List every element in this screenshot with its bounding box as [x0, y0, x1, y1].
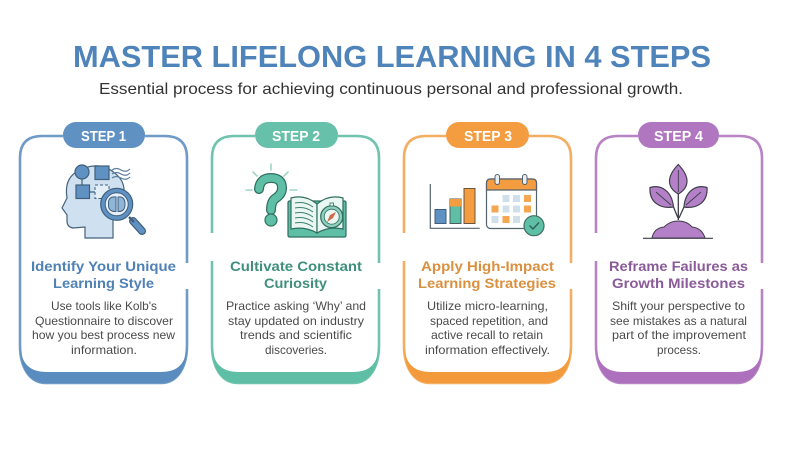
body text: stay updated on industry	[228, 314, 364, 328]
heading	[418, 258, 556, 291]
body text	[32, 299, 175, 357]
heading: Identify Your Unique	[31, 258, 176, 274]
step 2 badge: STEP 2	[272, 128, 320, 145]
step 1 badge: STEP 1	[81, 128, 126, 145]
icon: growing plant	[643, 164, 713, 238]
body text: part of the improvement	[612, 328, 747, 342]
title: MASTER LIFELONG LEARNING IN 4 STEPS	[73, 39, 711, 74]
heading: Cultivate Constant	[230, 258, 362, 274]
body text: Use tools like Kolb's	[51, 299, 157, 313]
body text: Practice asking ‘Why’ and	[226, 299, 366, 313]
heading	[31, 258, 176, 291]
step 4 badge: STEP 4	[654, 128, 704, 145]
body text: spaced repetition, and	[430, 314, 548, 328]
body text: how you best process new	[32, 328, 175, 342]
body text: active recall to retain	[431, 328, 543, 342]
panel: step 1	[20, 122, 187, 383]
panel: step 4	[596, 122, 762, 383]
heading	[230, 258, 362, 291]
icon: bar chart and calendar	[430, 174, 544, 236]
body text: information effectively.	[425, 343, 550, 357]
step 1 badge	[63, 122, 145, 148]
heading: Apply High-Impact	[421, 258, 554, 274]
heading	[609, 258, 748, 291]
step 3 badge	[446, 122, 529, 148]
body text	[425, 299, 550, 357]
body text	[226, 299, 366, 357]
step 3 badge: STEP 3	[464, 128, 512, 145]
heading: Learning Style	[53, 275, 154, 291]
step 4 badge	[638, 122, 719, 148]
icon: question mark and open book	[246, 164, 346, 237]
heading: Learning Strategies	[418, 275, 556, 291]
heading: Growth Milestones	[612, 275, 745, 291]
step 2 badge	[255, 122, 338, 148]
body text: trends and scientific	[240, 328, 352, 342]
heading: Curiosity	[264, 275, 327, 291]
panel: step 2	[212, 122, 379, 383]
heading: Reframe Failures as	[609, 258, 748, 274]
body text: Shift your perspective to	[612, 299, 745, 313]
icon: head with magnifier	[62, 165, 142, 238]
body text: discoveries.	[265, 343, 327, 357]
subtitle: Essential process for achieving continuous personal and professional growth.	[99, 81, 683, 98]
body text: see mistakes as a natural	[610, 314, 747, 328]
body text: information.	[71, 343, 137, 357]
body text	[610, 299, 747, 357]
panel: step 3	[404, 122, 571, 383]
body text: Questionnaire to discover	[35, 314, 173, 328]
body text: process.	[657, 343, 701, 357]
body text: Utilize micro-learning,	[427, 299, 548, 313]
